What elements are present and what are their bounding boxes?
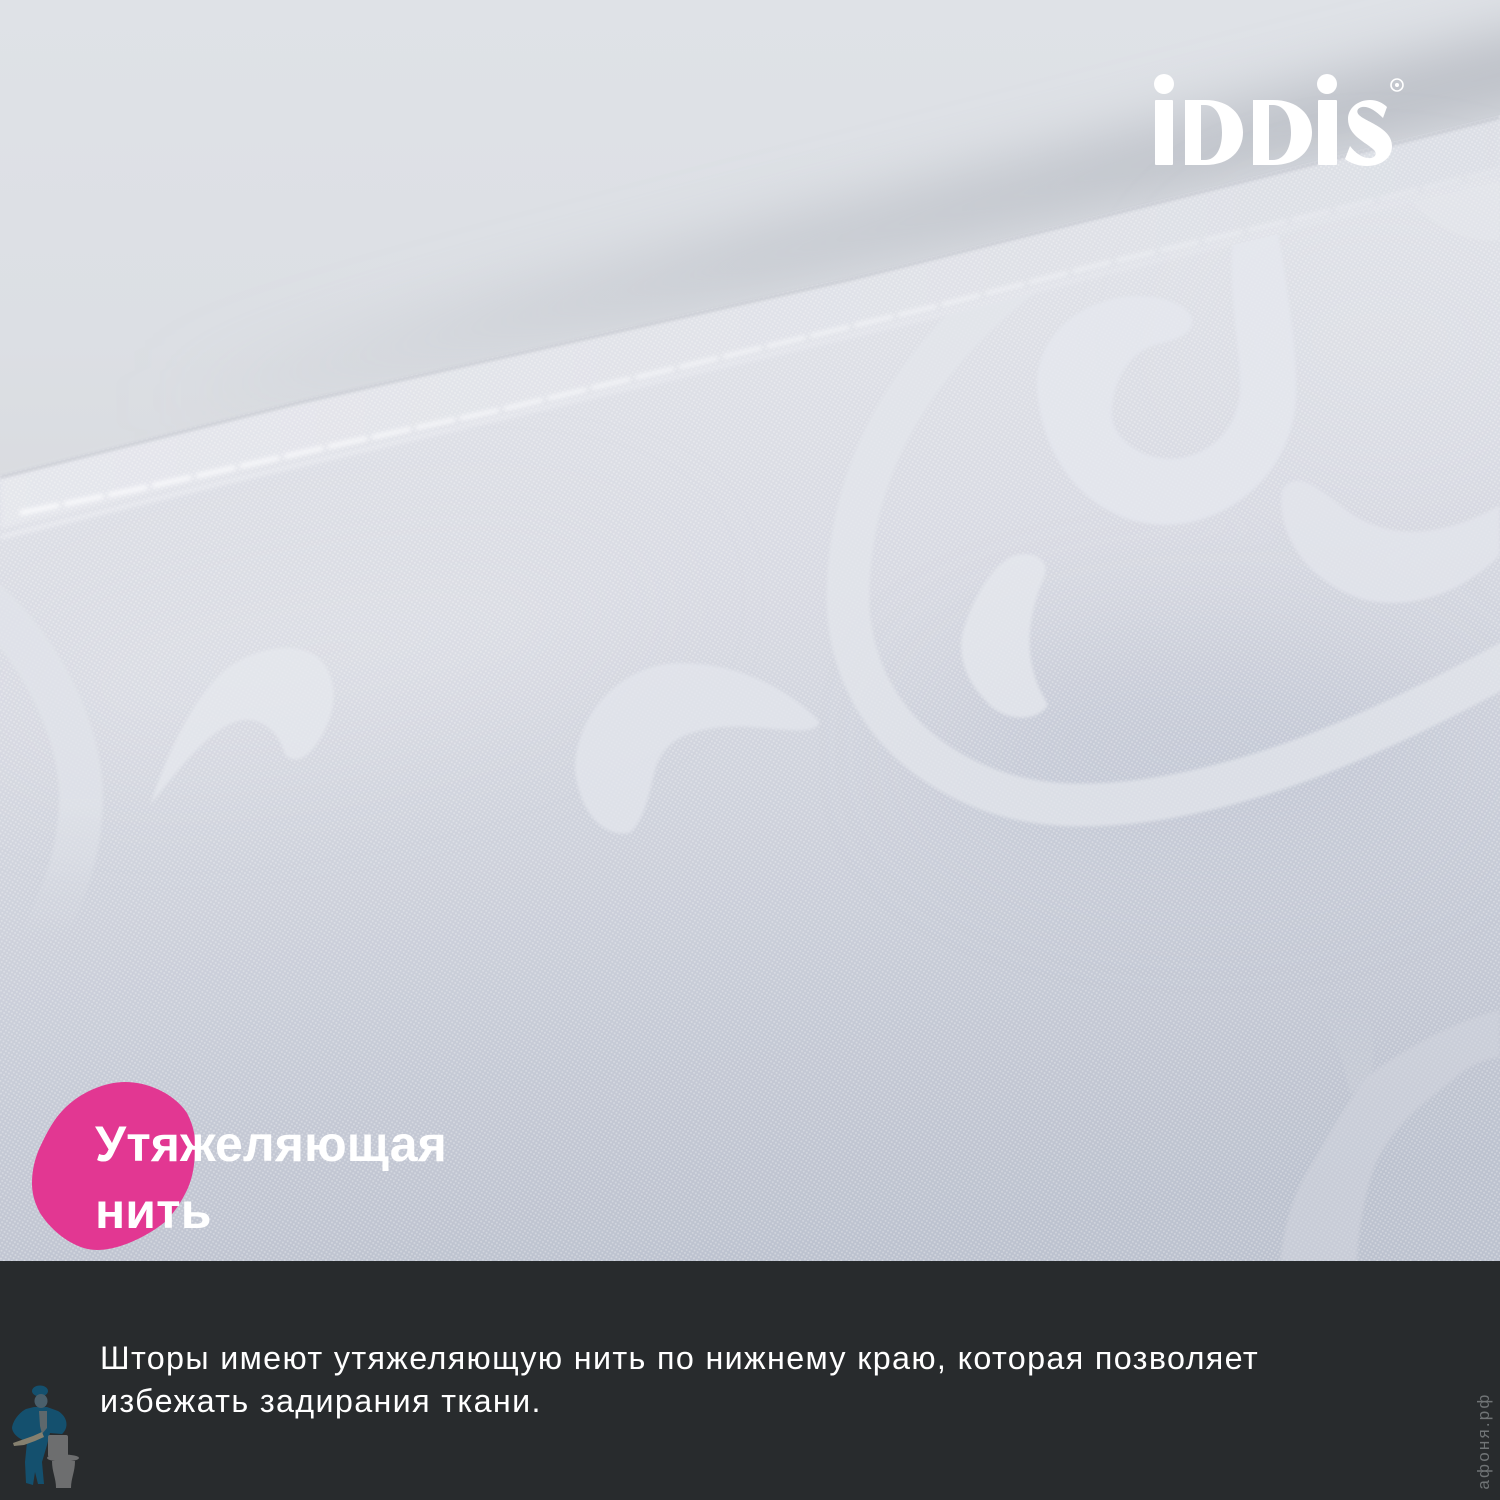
icon: plumber with toilet	[12, 1386, 79, 1488]
description text	[100, 1340, 1259, 1418]
watermark: afonya.rf: афоня.рф	[1474, 1392, 1493, 1490]
text panel: dark footer	[0, 1261, 1500, 1500]
hem band	[0, 115, 1500, 530]
fabric body	[0, 115, 1500, 1262]
toilet	[47, 1435, 79, 1488]
swirl: left edge band	[54, 744, 102, 845]
swirl pattern	[54, 332, 1500, 1261]
heading: Утяжеляющая	[95, 1116, 447, 1172]
pink blob behind heading	[32, 1082, 195, 1250]
plumber shirt	[39, 1411, 47, 1434]
soft tonal variation on fabric	[0, 220, 1500, 860]
description text: Шторы имеют утяжеляющую нить по нижнему краю, которая позволяет	[100, 1340, 1259, 1376]
plumber face	[34, 1394, 48, 1408]
heading: нить	[95, 1183, 212, 1239]
swirl: left hook	[150, 648, 334, 805]
fabric weave texture	[0, 115, 1500, 1262]
swirl: spiral	[1041, 332, 1294, 524]
heading	[34, 1082, 447, 1250]
swirl: small drop	[961, 554, 1048, 718]
shadow above fold	[0, 0, 1500, 475]
swirl: right teardrop	[1281, 481, 1500, 603]
hem stitching	[0, 117, 1500, 537]
swirl: lower right	[1280, 1010, 1500, 1262]
swirl: top right	[1390, 160, 1500, 241]
wrench	[13, 1432, 44, 1446]
swirl: centre hook	[575, 663, 820, 834]
logo: iddis	[1154, 74, 1404, 166]
description text: избежать задирания ткани.	[100, 1382, 542, 1418]
background: upper plain surface	[0, 0, 1500, 560]
swirl: large band	[828, 495, 1500, 827]
